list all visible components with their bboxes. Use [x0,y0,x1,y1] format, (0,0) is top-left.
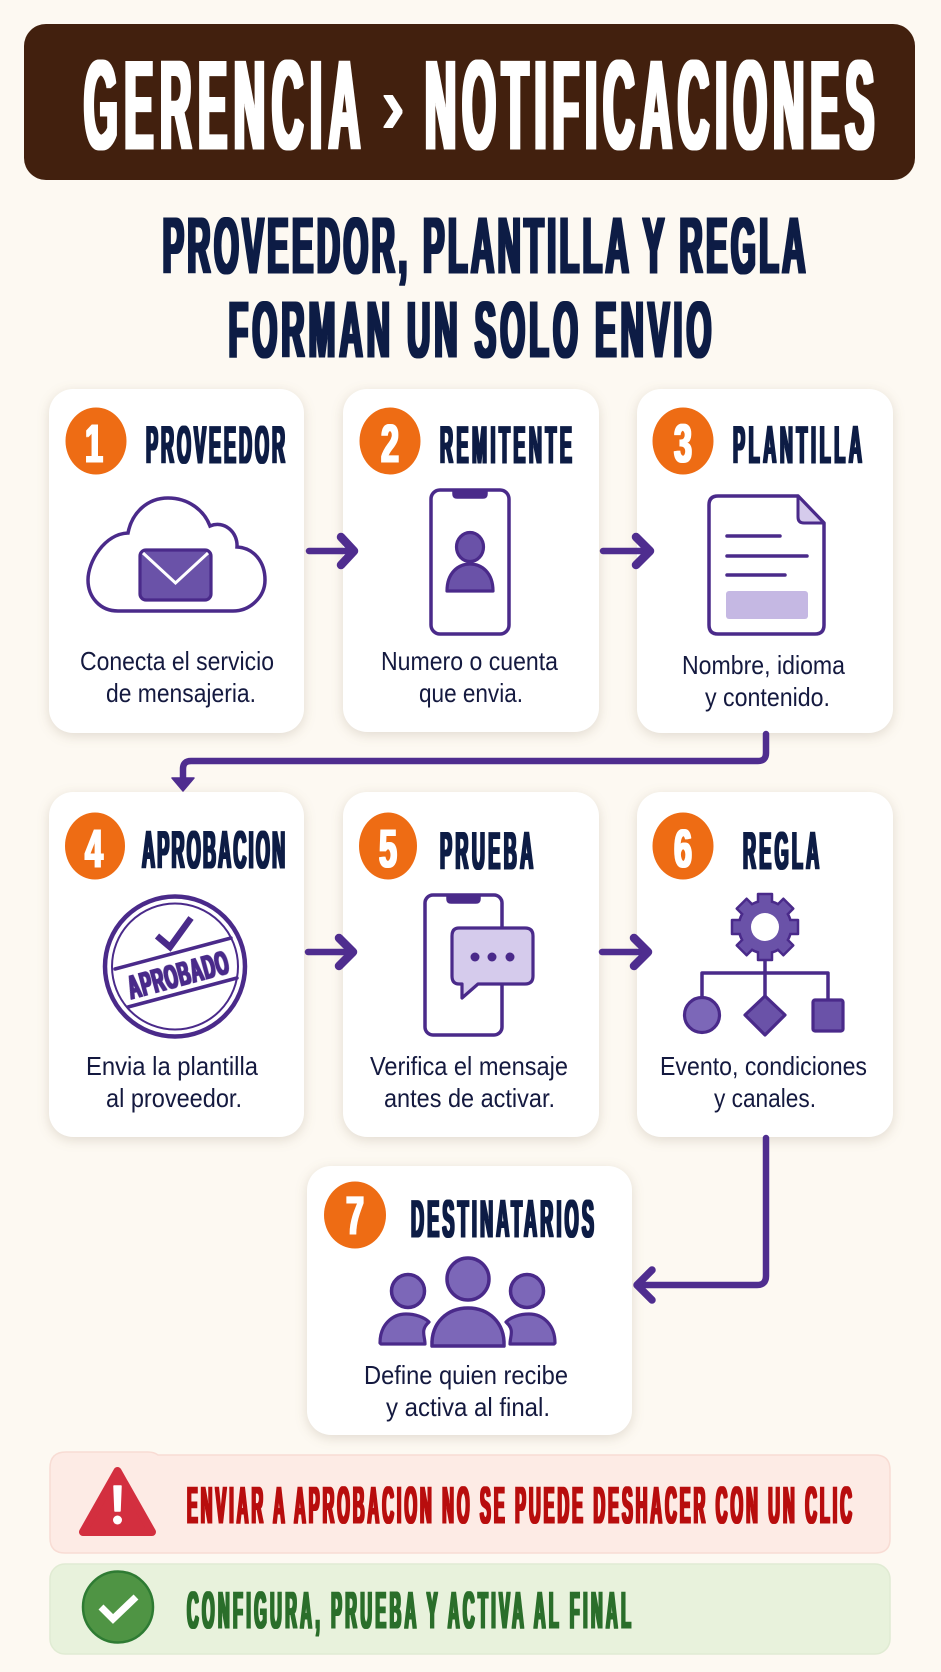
warning banner [50,1452,890,1553]
title banner: › [380,58,406,152]
description [660,1051,867,1113]
description: que envia. [419,678,523,708]
connector arrow: step 3 to 4 [172,734,766,791]
connector arrow: step 6 to 7 [637,1138,766,1300]
heading remitente: REMITENTE [440,416,572,475]
success text: CONFIGURA, PRUEBA Y ACTIVA AL FINAL [187,1582,631,1640]
icon: gear rule tree [684,894,843,1035]
step number 2: 2 [381,415,399,474]
step number 1 [66,408,126,474]
title banner [24,24,915,180]
description: y contenido. [705,682,830,712]
icon: green check [83,1572,153,1642]
description: antes de activar. [384,1083,555,1113]
subtitle: FORMAN UN SOLO ENVIO [229,285,711,374]
step number 5 [359,812,417,880]
heading proveedor: PROVEEDOR [146,416,285,475]
panel: step 4 aprobacion [49,792,304,1137]
subtitle: PROVEEDOR, PLANTILLA Y REGLA [163,201,805,290]
description [381,646,558,708]
icon: approved stamp: APROBADO [123,943,233,1007]
description [86,1051,258,1113]
panel: step 7 destinatarios [307,1166,632,1435]
heading regla: REGLA [743,822,819,881]
heading prueba: PRUEBA [440,822,533,881]
description [80,646,274,708]
description: y canales. [714,1083,816,1113]
description: Nombre, idioma [682,650,845,680]
arrow: step 4 to 5 [308,938,353,966]
step number 5: 5 [379,820,397,879]
description: Conecta el servicio [80,646,274,676]
step number 7 [324,1182,386,1248]
arrow: step 5 to 6 [602,938,648,966]
warning text: ENVIAR A APROBACION NO SE PUEDE DESHACER CON UN CLIC [187,1477,852,1535]
description: de mensajeria. [106,678,256,708]
panel: step 5 prueba [343,792,599,1137]
description [364,1360,568,1422]
arrow: step 2 to 3 [603,537,650,565]
success banner [50,1564,890,1654]
step number 4: 4 [85,820,103,879]
heading aprobacion: APROBACION [142,821,285,880]
panel: step 6 regla [637,792,893,1137]
description: y activa al final. [386,1392,550,1422]
icon: phone with user [431,490,509,634]
step number 3 [652,408,714,474]
icon: phone with chat bubble [425,895,533,1035]
arrow: step 1 to 2 [309,537,354,565]
step number 1: 1 [85,415,103,474]
panel: step 1 proveedor [49,389,304,733]
description: Numero o cuenta [381,646,558,676]
icon: document template [709,496,824,634]
panel: step 3 plantilla [637,389,893,733]
subtitle [163,201,805,374]
heading destinatarios: DESTINATARIOS [411,1190,594,1249]
title banner: GERENCIA [84,35,360,177]
panel: step 2 remitente [343,389,599,732]
step number 6: 6 [674,820,692,879]
step number 2 [360,408,420,474]
title banner: NOTIFICACIONES [425,35,874,177]
icon: group of people [380,1258,555,1346]
description: Verifica el mensaje [370,1051,568,1081]
step number 7: 7 [346,1187,364,1246]
heading plantilla: PLANTILLA [733,416,862,475]
icon: approved stamp [105,896,245,1036]
description [370,1051,568,1113]
description: al proveedor. [106,1083,242,1113]
icon: cloud with envelope [88,498,265,611]
description [682,650,845,712]
icon: warning triangle [83,1471,152,1532]
description: Envia la plantilla [86,1051,258,1081]
description: Evento, condiciones [660,1051,867,1081]
step number 4 [65,812,125,880]
step number 3: 3 [674,415,692,474]
description: Define quien recibe [364,1360,568,1390]
step number 6 [652,812,714,880]
